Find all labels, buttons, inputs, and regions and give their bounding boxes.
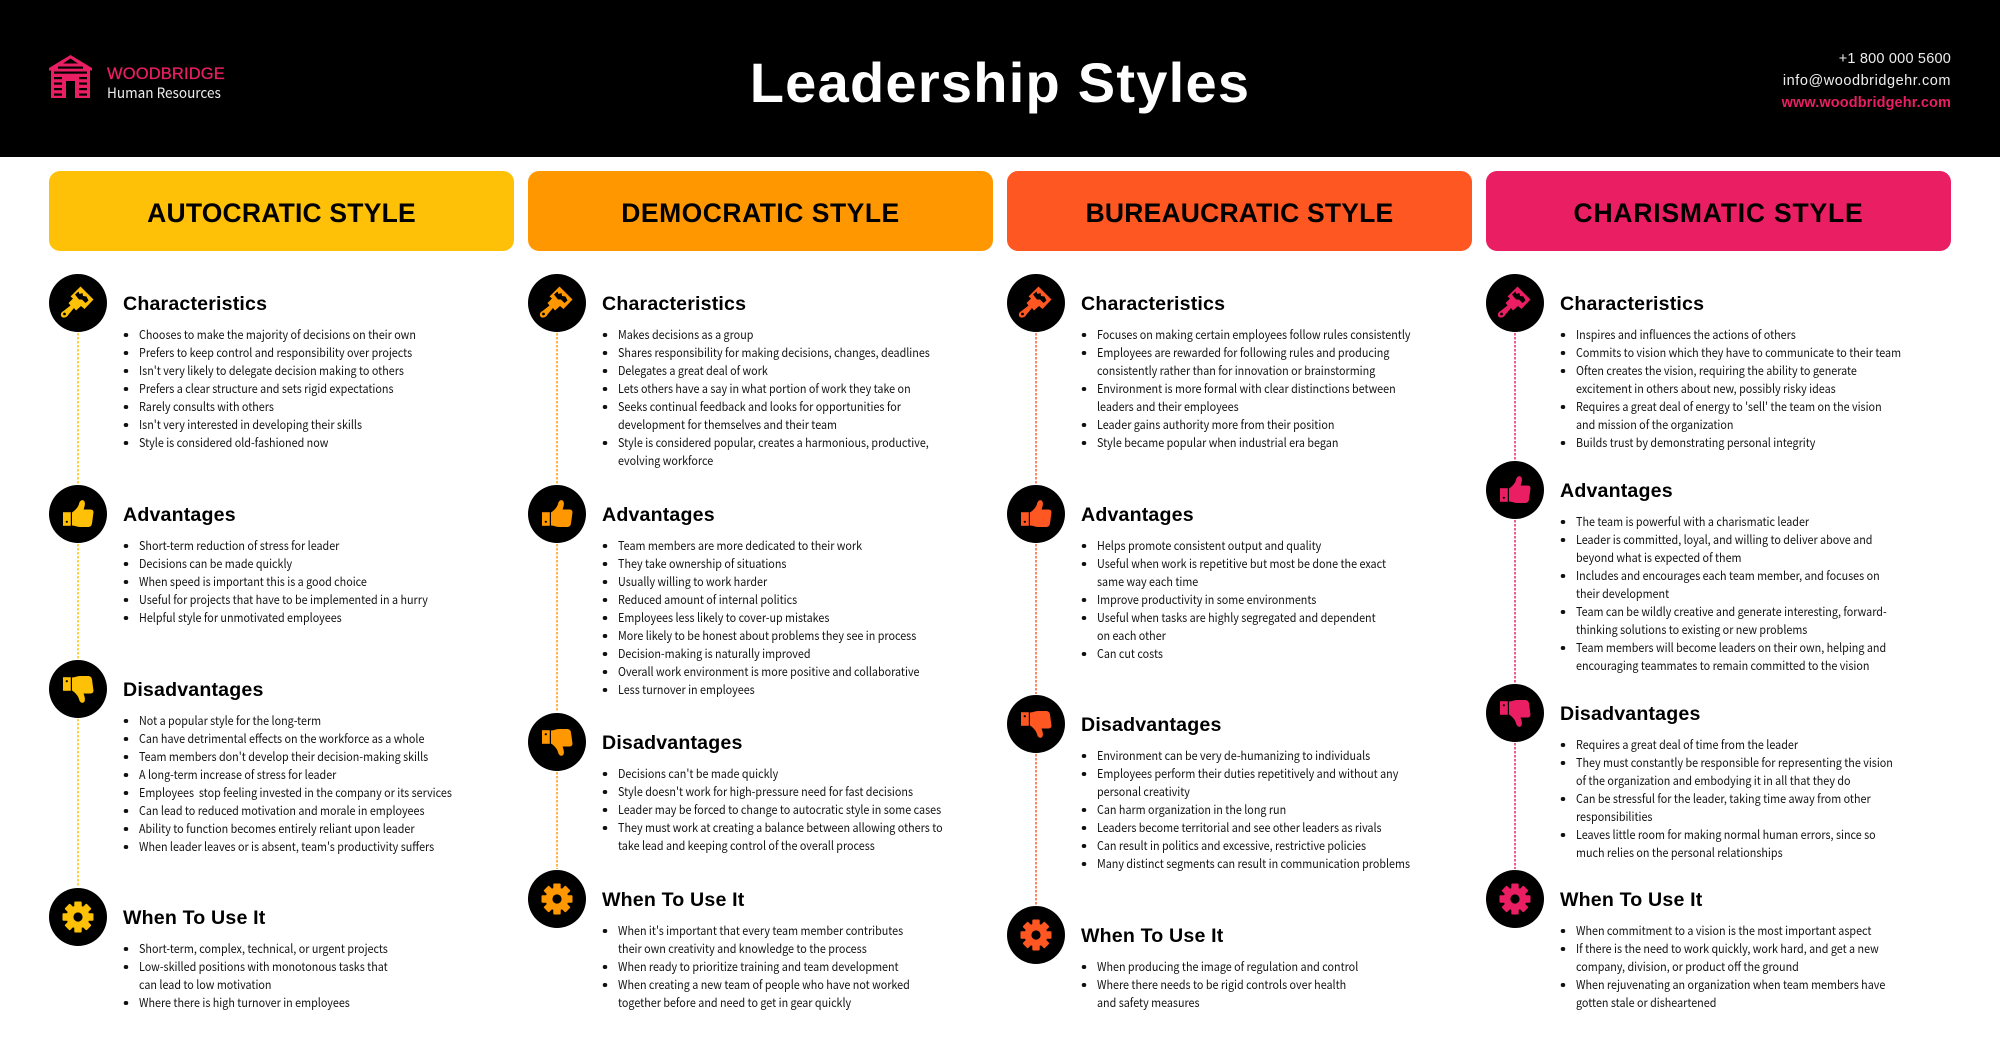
section: when to use it [49,888,388,1010]
logo: Woodbridge Human Resources [49,55,225,103]
heading: When To Use It [1081,925,1223,947]
heading: Advantages [1560,480,1673,502]
icon: paintbrush [1007,274,1065,332]
title: Leadership Styles [750,51,1250,114]
list: Style is considered old-fashioned now [139,434,328,450]
list: The team is powerful with a charismatic leader [1576,512,1809,530]
list: Includes and encourages each team member, and focuses on [1576,566,1880,584]
list: Team members are more dedicated to their work [618,536,862,554]
panel: democratic style [528,171,993,1010]
list: Team members will become leaders on their own, helping and [1576,638,1886,656]
list [602,536,919,698]
list: and mission of the organization [1576,416,1733,432]
list: Style is considered popular, creates a harmonious, productive, [618,434,929,450]
section: characteristics [528,274,930,468]
heading: bureaucratic style: BUREAUCRATIC STYLE [1086,198,1393,228]
brand name: WOODBRIDGE [107,64,225,82]
list [1495,274,1912,452]
list: Delegates a great deal of work [618,362,768,378]
list: Employees stop feeling invested in the company or its services [139,784,452,800]
list: of the organization and embodying it in all that they do [1576,772,1851,788]
list: Team members don't develop their decision-making skills [139,748,428,764]
list: When leader leaves or is absent, team's productivity suffers [139,838,434,854]
list: Prefers a clear structure and sets rigid expectations [139,380,394,396]
list: Can be stressful for the leader, taking time away from other [1576,790,1871,806]
section: disadvantages [1007,695,1410,872]
list: Decision-making is naturally improved [618,644,811,662]
section: when to use it [1007,906,1358,1010]
list: Makes decisions as a group [618,326,753,342]
list: They must constantly be responsible for representing the vision [1576,754,1893,770]
icon: gear [1007,906,1065,964]
list: When producing the image of regulation and control [1097,958,1358,974]
list: Employees less likely to cover-up mistakes [618,608,829,626]
list [124,712,452,854]
heading: Disadvantages [123,679,264,701]
connector [77,333,79,484]
heading: Characteristics [602,293,746,315]
contact details: www.woodbridgehr.com [1782,94,1951,110]
list: take lead and keeping control of the overall process [618,836,875,854]
list: their own creativity and knowledge to the process [618,940,867,956]
list: When speed is important this is a good choice [139,572,367,590]
header bar [0,0,2000,157]
list: If there is the need to work quickly, work hard, and get a new [1576,940,1879,956]
icon: thumbs up [528,485,586,543]
icon: gear [49,888,107,946]
list: gotten stale or disheartened [1576,994,1716,1010]
heading: Characteristics [1081,293,1225,315]
connector [1035,754,1037,905]
list [1495,461,1912,674]
list: Style became popular when industrial era began [1097,434,1338,450]
list: Usually willing to work harder [618,572,767,590]
list: Chooses to make the majority of decisions on their own [139,326,416,342]
section: disadvantages [1486,684,1951,862]
list: Where there is high turnover in employees [139,994,350,1010]
list: Decisions can't be made quickly [618,764,778,782]
list: Helps promote consistent output and quality [1097,536,1321,554]
list: Requires a great deal of energy to 'sell' the team on the vision [1576,398,1882,414]
heading: democratic style [528,171,993,251]
list: When ready to prioritize training and team development [618,958,899,974]
icon: paintbrush [49,274,107,332]
list [602,922,910,1010]
icon: paintbrush [1486,274,1544,332]
heading: democratic style: DEMOCRATIC STYLE [621,198,900,228]
list: Many distinct segments can result in communication problems [1097,854,1410,872]
list [1495,870,1912,1012]
list: same way each time [1097,572,1198,590]
connector [1035,544,1037,694]
list: on each other [1097,626,1166,644]
list: thinking solutions to existing or new problems [1576,620,1807,638]
icon: paintbrush [528,274,586,332]
list [124,940,388,1010]
list: Ability to function becomes entirely reliant upon leader [139,820,415,836]
list: Decisions can be made quickly [139,554,292,572]
list: Low-skilled positions with monotonous tasks that [139,958,388,974]
list: Leader gains authority more from their position [1097,416,1334,432]
list: their development [1576,584,1669,602]
list [1082,326,1411,450]
section: advantages [49,485,428,626]
panel: bureaucratic style [1007,171,1472,1010]
heading: When To Use It [602,889,744,911]
section: characteristics [49,274,416,450]
heading: Characteristics [1560,293,1704,315]
list: Focuses on making certain employees follow rules consistently [1097,326,1411,342]
list: A long-term increase of stress for leader [139,766,336,782]
heading: Advantages [1081,504,1194,526]
list: Builds trust by demonstrating personal integrity [1576,434,1815,450]
list: Can have detrimental effects on the workforce as a whole [139,730,424,746]
heading: Characteristics [123,293,267,315]
list: responsibilities [1576,808,1652,824]
list: Leader is committed, loyal, and willing to deliver above and [1576,530,1872,548]
connector [77,544,79,659]
list: Team can be wildly creative and generate interesting, forward- [1576,602,1887,620]
list: much relies on the personal relationships [1576,844,1783,860]
heading: Advantages [123,504,236,526]
list: Leaves little room for making normal human errors, since so [1576,826,1876,842]
section: when to use it [1486,870,1951,1012]
list: Seeks continual feedback and looks for opportunities for [618,398,901,414]
list [602,326,930,468]
list: Requires a great deal of time from the leader [1576,736,1798,752]
list: encouraging teammates to remain committed to the vision [1576,656,1869,674]
list: can lead to low motivation [139,976,272,992]
list: Shares responsibility for making decisions, changes, deadlines [618,344,930,360]
list: Rarely consults with others [139,398,274,414]
list: Where there needs to be rigid controls over health [1097,976,1346,992]
list: and safety measures [1097,994,1200,1010]
section: advantages [528,485,919,698]
icon: thumbs up [1486,461,1544,519]
icon: thumbs down [1007,695,1065,753]
list: Useful when work is repetitive but most be done the exact [1097,554,1386,572]
list: Employees are rewarded for following rules and producing [1097,344,1389,360]
icon: thumbs up [1007,485,1065,543]
section: advantages [1007,485,1386,662]
list: Environment can be very de-humanizing to individuals [1097,746,1370,764]
list: Improve productivity in some environments [1097,590,1316,608]
list: beyond what is expected of them [1576,548,1742,566]
section: characteristics [1007,274,1411,450]
list: Leader may be forced to change to autocratic style in some cases [618,800,941,818]
heading: charismatic style: CHARISMATIC STYLE [1574,198,1863,228]
list [124,326,416,450]
brand subtitle: Human Resources [107,83,221,103]
list [1082,746,1410,872]
list: Often creates the vision, requiring the ability to generate [1576,362,1857,378]
list: When rejuvenating an organization when team members have [1576,976,1885,992]
list: Leaders become territorial and see other leaders as rivals [1097,818,1382,836]
section: disadvantages [49,660,452,854]
connector [556,333,558,484]
list: They take ownership of situations [618,554,786,572]
heading: When To Use It [1560,889,1702,911]
list: Commits to vision which they have to communicate to their team [1576,344,1901,360]
list: Less turnover in employees [618,680,755,698]
icon: house [49,55,92,98]
icon: thumbs up [49,485,107,543]
heading: Disadvantages [602,732,743,754]
list: When creating a new team of people who have not worked [618,976,910,992]
list [1495,684,1912,862]
list [1082,536,1386,662]
list [1016,906,1433,1012]
panel: charismatic style [1486,0,1951,860]
connector [556,544,558,712]
list: Reduced amount of internal politics [618,590,797,608]
section: characteristics [1486,274,1951,452]
connector [1514,520,1516,683]
list: Lets others have a say in what portion of work they take on [618,380,911,396]
list: Style doesn't work for high-pressure need for fast decisions [618,782,913,800]
connector [1514,743,1516,869]
section: disadvantages [528,713,943,854]
icon: gear [528,870,586,928]
list: They must work at creating a balance between allowing others to [618,818,943,836]
contact details: +1 800 000 5600 [1839,50,1951,66]
icon: thumbs down [1486,684,1544,742]
list: excitement in others about new, possibly risky ideas [1576,380,1836,396]
list: When commitment to a vision is the most important aspect [1576,922,1871,938]
connector [77,719,79,887]
list: development for themselves and their team [618,416,837,432]
heading: charismatic style [1486,171,1951,251]
contact details [1782,50,1951,110]
icon: gear [1486,870,1544,928]
list [602,764,943,854]
list: company, division, or product off the ground [1576,958,1799,974]
list: together before and need to get in gear quickly [618,994,851,1010]
icon: thumbs down [528,713,586,771]
list: Short-term, complex, technical, or urgent projects [139,940,388,956]
list: Not a popular style for the long-term [139,712,321,728]
list: Short-term reduction of stress for leader [139,536,339,554]
contact details: info@woodbridgehr.com [1783,72,1951,88]
connector [1035,333,1037,484]
list: leaders and their employees [1097,398,1239,414]
connector [1514,333,1516,460]
list: consistently rather than for innovation or brainstorming [1097,362,1375,378]
list: Useful when tasks are highly segregated and dependent [1097,608,1376,626]
list: Helpful style for unmotivated employees [139,608,342,626]
list: Isn't very interested in developing their skills [139,416,362,432]
heading: Disadvantages [1560,703,1701,725]
list: Isn't very likely to delegate decision making to others [139,362,404,378]
list: Useful for projects that have to be implemented in a hurry [139,590,428,608]
list: evolving workforce [618,452,713,468]
section: advantages [1486,461,1951,674]
panel: autocratic style [49,171,514,1010]
list: Inspires and influences the actions of others [1576,326,1796,342]
list: Employees perform their duties repetitively and without any [1097,764,1398,782]
heading: autocratic style: AUTOCRATIC STYLE [147,198,416,228]
list: Environment is more formal with clear distinctions between [1097,380,1396,396]
list: Overall work environment is more positive and collaborative [618,662,919,680]
list: Prefers to keep control and responsibility over projects [139,344,412,360]
list: Can lead to reduced motivation and morale in employees [139,802,425,818]
section: when to use it [528,870,910,1010]
list: Can result in politics and excessive, restrictive policies [1097,836,1366,854]
heading: Advantages [602,504,715,526]
list: When it's important that every team member contributes [618,922,903,938]
list [124,536,428,626]
heading: autocratic style [49,171,514,251]
list: Can cut costs [1097,644,1163,662]
heading: When To Use It [123,907,265,929]
list: More likely to be honest about problems they see in process [618,626,916,644]
connector [556,772,558,869]
list: Can harm organization in the long run [1097,800,1286,818]
heading: bureaucratic style [1007,171,1472,251]
heading: Disadvantages [1081,714,1222,736]
list: personal creativity [1097,782,1190,800]
icon: thumbs down [49,660,107,718]
